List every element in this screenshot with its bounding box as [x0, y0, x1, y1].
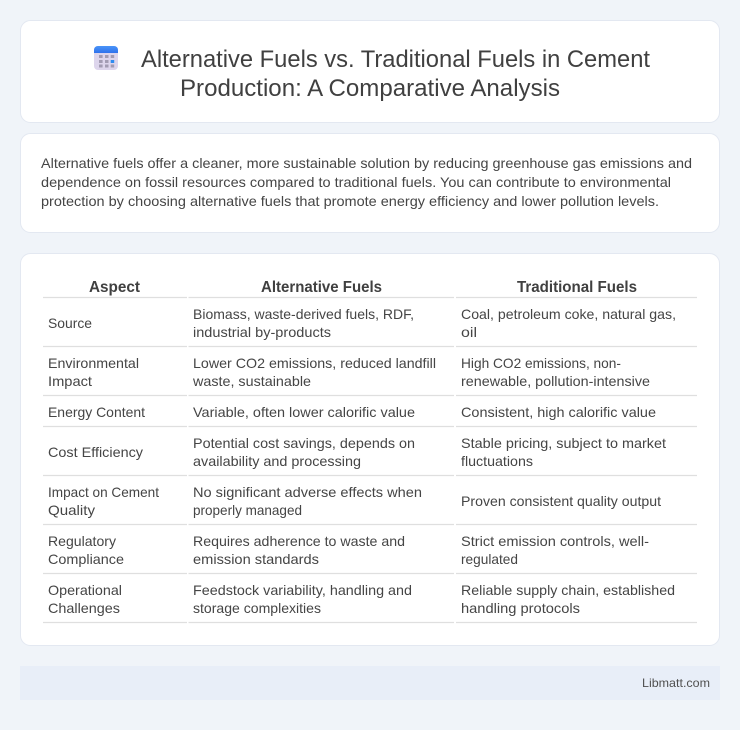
table header: Traditional Fuels — [517, 279, 637, 296]
row: regulatory compliance: Regulatory — [48, 533, 116, 549]
row: impact on cement quality: No significant adverse effects when — [193, 484, 422, 500]
table header: Alternative Fuels — [261, 279, 382, 296]
row: environmental impact: waste, sustainable — [192, 373, 311, 389]
row: environmental impact — [48, 355, 650, 389]
row: environmental impact: Environmental — [48, 355, 139, 371]
row: environmental impact: renewable, pollution-intensive — [461, 373, 650, 389]
intro text: dependence on fossil resources compared to traditional fuels. You can contribute to environmental — [41, 174, 671, 190]
footer — [20, 666, 720, 700]
row: impact on cement quality: Quality — [48, 502, 95, 518]
row: regulatory compliance — [48, 533, 649, 567]
intro text: protection by choosing alternative fuels that promote energy efficiency and lower pollution levels. — [41, 193, 659, 209]
row: energy content: Consistent, high calorific value — [461, 404, 656, 420]
panel: introduction — [20, 134, 720, 232]
table header: Aspect — [89, 279, 141, 296]
title — [141, 46, 650, 102]
panel: title card — [20, 20, 720, 122]
row: cost efficiency: availability and processing — [193, 453, 361, 469]
title: Alternative Fuels vs. Traditional Fuels in Cement — [141, 46, 650, 73]
row: source: Source — [48, 315, 92, 331]
row: cost efficiency: Stable pricing, subject to market — [461, 435, 666, 451]
row: source: Coal, petroleum coke, natural gas, — [461, 306, 676, 322]
row: source — [48, 306, 676, 340]
row: environmental impact: Lower CO2 emissions, reduced landfill — [193, 355, 436, 371]
row: operational challenges — [48, 582, 675, 616]
intro text — [41, 155, 692, 209]
row: operational challenges: Challenges — [48, 600, 120, 616]
title: Production: A Comparative Analysis — [180, 75, 560, 102]
row: source: industrial by-products — [193, 324, 331, 340]
row: impact on cement quality: Proven consistent quality output — [461, 493, 661, 509]
row: regulatory compliance: regulated — [461, 551, 518, 567]
row: regulatory compliance: Strict emission controls, well- — [461, 533, 649, 549]
row: energy content: Variable, often lower calorific value — [193, 404, 415, 420]
row: operational challenges: handling protocols — [461, 600, 580, 616]
row: source: oil — [461, 324, 477, 340]
row: operational challenges: Reliable supply chain, established — [461, 582, 675, 598]
row: energy content — [48, 404, 656, 420]
row: regulatory compliance: Requires adherence to waste and — [193, 533, 405, 549]
row: environmental impact: High CO2 emissions, non- — [461, 355, 621, 371]
row: impact on cement quality — [48, 484, 661, 518]
row: cost efficiency: Cost Efficiency — [48, 444, 143, 460]
row: environmental impact: Impact — [48, 373, 92, 389]
footer: Libmatt.com — [642, 676, 710, 690]
table header — [89, 279, 637, 296]
row: operational challenges: Feedstock variability, handling and — [193, 582, 412, 598]
row: impact on cement quality: Impact on Cement — [48, 484, 159, 500]
row: operational challenges: Operational — [48, 582, 122, 598]
row: energy content: Energy Content — [48, 404, 145, 420]
row: source: Biomass, waste-derived fuels, RDF, — [193, 306, 414, 322]
row: cost efficiency — [48, 435, 666, 469]
row: operational challenges: storage complexities — [193, 600, 321, 616]
row: cost efficiency: Potential cost savings, depends on — [193, 435, 415, 451]
intro text: Alternative fuels offer a cleaner, more sustainable solution by reducing greenhouse gas emissions and — [41, 155, 692, 171]
icon: calendar — [94, 46, 118, 70]
row: regulatory compliance: emission standards — [193, 551, 319, 567]
row: regulatory compliance: Compliance — [48, 551, 124, 567]
row: cost efficiency: fluctuations — [461, 453, 533, 469]
row: impact on cement quality: properly managed — [193, 502, 302, 518]
panel: comparison table — [20, 254, 720, 646]
